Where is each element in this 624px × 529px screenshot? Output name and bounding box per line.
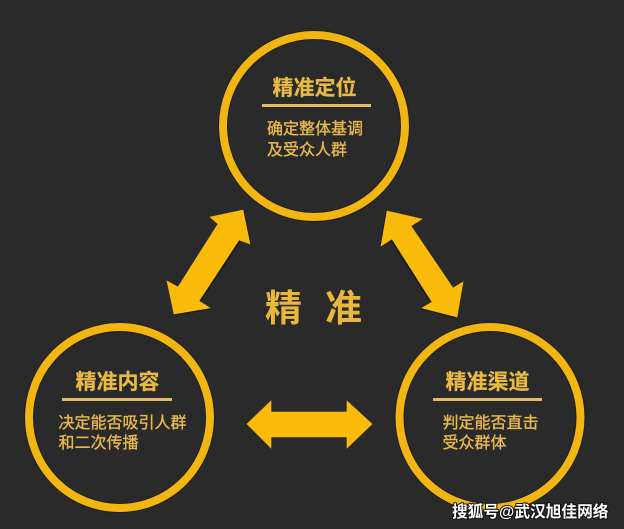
panel: top circle 精准定位 xyxy=(223,35,405,217)
watermark: 搜狐号@武汉旭佳网络 xyxy=(452,502,609,521)
underline: right xyxy=(433,398,542,401)
text block: left description xyxy=(58,414,187,452)
text block: right description xyxy=(442,414,539,452)
text block: left description: 和二次传播 xyxy=(58,434,139,452)
center title: 精准 xyxy=(265,288,362,329)
text block: top description: 及受众人群 xyxy=(267,141,347,159)
panel: left circle 精准内容 xyxy=(29,327,210,508)
text block: top description xyxy=(267,120,363,159)
arrow: top circle to left circle xyxy=(167,210,250,314)
arrow: left circle to right circle xyxy=(247,401,372,448)
text block: top description: 确定整体基调 xyxy=(267,120,363,138)
heading: 精准定位: 精准定位 xyxy=(272,76,356,100)
arrow: top circle to right circle xyxy=(381,211,463,317)
text block: right description: 受众群体 xyxy=(442,434,507,452)
center title: 精准: 准 xyxy=(325,288,362,329)
text block: left description: 决定能否吸引人群 xyxy=(58,414,187,432)
circle ring: left xyxy=(29,327,210,508)
circle ring: right xyxy=(400,327,580,508)
underline: top xyxy=(262,104,371,107)
text block: right description: 判定能否直击 xyxy=(442,414,539,432)
panel: right circle 精准渠道 xyxy=(400,327,580,508)
circle ring: top xyxy=(223,35,405,217)
heading: 精准渠道: 精准渠道 xyxy=(446,371,530,394)
heading: 精准内容: 精准内容 xyxy=(76,370,160,394)
center title: 精准: 精 xyxy=(265,288,302,329)
underline: left xyxy=(62,398,172,401)
